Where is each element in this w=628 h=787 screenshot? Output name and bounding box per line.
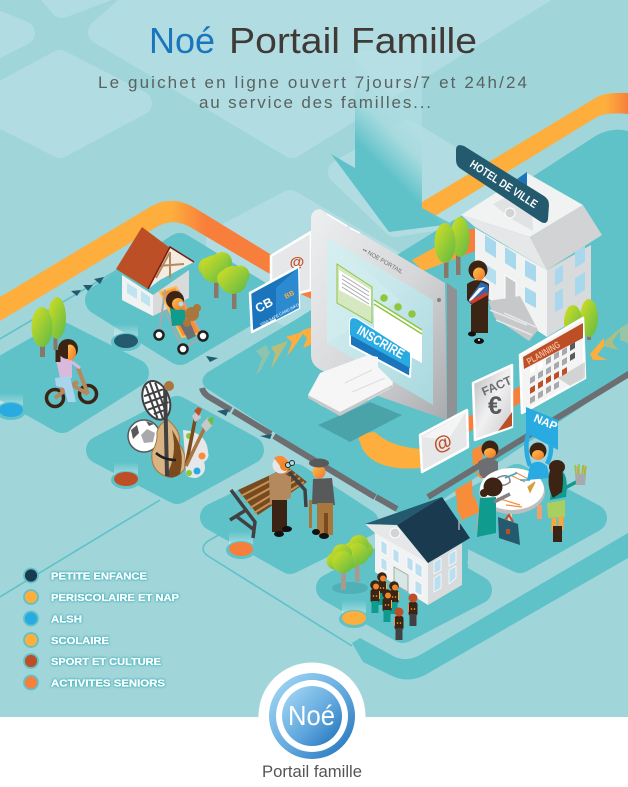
- chevrons left: [256, 327, 312, 375]
- subtitle: Le guichet en ligne ouvert 7jours/7 et 24h/24: [98, 73, 527, 92]
- hand: [308, 355, 393, 416]
- child on bike: [46, 339, 96, 406]
- logo: [258, 662, 366, 781]
- monitor: •• NOE PORTAIL: [361, 248, 404, 276]
- hotel de ville sign: [456, 145, 549, 223]
- marker: scolaire: [339, 600, 369, 628]
- email envelope: [420, 410, 468, 472]
- envelope behind card: @: [290, 254, 304, 271]
- upper right orange road: [422, 93, 628, 216]
- legend item: sport et culture: SPORT ET CULTURE: [51, 656, 161, 668]
- inscrire button: INSCRIRE: [354, 323, 407, 362]
- legend item: periscolaire et nap: [24, 590, 179, 604]
- title: Portail Famille: [229, 20, 477, 61]
- invoice: [473, 365, 514, 440]
- monitor: [308, 209, 457, 420]
- lower teal road band: [352, 533, 628, 680]
- chevrons right: [590, 323, 628, 360]
- bank card: BB: [284, 290, 296, 301]
- subtitle: [98, 73, 527, 112]
- nap sign: NAP: [532, 413, 559, 433]
- girl in teal dress: [477, 478, 510, 537]
- logo: Portail famille: [262, 763, 362, 781]
- decorative light tiles: [0, 0, 548, 315]
- invoice: FACT: [480, 373, 514, 399]
- table top: [479, 468, 545, 514]
- sport and culture icons: [128, 377, 214, 478]
- white footer: [0, 717, 628, 787]
- mayor: [467, 260, 489, 344]
- light notch between school and table platforms: [473, 562, 507, 582]
- title: Noé: [149, 20, 215, 61]
- legend item: activites seniors: ACTIVITES SENIORS: [51, 678, 165, 690]
- pencil cup: [575, 464, 586, 485]
- inscrire button: [350, 318, 411, 377]
- steps: [488, 296, 538, 341]
- route arrows: [71, 277, 272, 439]
- chairs and legs: [455, 445, 542, 532]
- house: [116, 227, 194, 316]
- platform: home: [100, 248, 265, 350]
- oval trees near city hall: [434, 217, 470, 278]
- teal join between school and table platforms: [405, 530, 468, 570]
- big down arrow: [331, 50, 452, 232]
- subtitle: au service des familles...: [199, 93, 431, 112]
- legend item: scolaire: [24, 633, 109, 647]
- legend item: alsh: ALSH: [51, 614, 82, 626]
- platform: seniors: [214, 478, 365, 560]
- orange road left of monitor: [296, 276, 314, 300]
- school: [365, 497, 470, 605]
- city hall: [461, 172, 602, 341]
- platform: table: [440, 478, 593, 559]
- email envelope: @: [431, 431, 455, 457]
- logo: Noé: [288, 700, 335, 731]
- bench: [230, 467, 307, 538]
- trees behind planning: [564, 299, 598, 340]
- legend: [24, 568, 179, 690]
- legend item: alsh: [24, 612, 82, 626]
- invoice: €: [488, 392, 502, 420]
- child holding nap sign: [526, 434, 551, 480]
- teal central platform: [202, 130, 628, 518]
- thin teal route lines: [0, 241, 352, 646]
- legend item: periscolaire et nap: PERISCOLAIRE ET NAP: [51, 592, 179, 604]
- form panel left: [337, 264, 372, 323]
- orange connectors between documents: [466, 386, 520, 434]
- standing woman: [547, 460, 580, 542]
- legend item: sport et culture: [24, 654, 161, 668]
- form panel right: [374, 294, 422, 363]
- elderly man with glasses: [269, 456, 294, 537]
- marker: petite enfance: [111, 324, 141, 351]
- seated child: [475, 440, 505, 478]
- round trees near school: [326, 535, 373, 594]
- planning calendar: PLANNING: [525, 340, 563, 368]
- floor shadow of hand: [318, 402, 402, 442]
- orange curve under monitor: [357, 432, 422, 469]
- title: [149, 20, 477, 61]
- planning calendar: [520, 318, 585, 413]
- marker: alsh: [0, 393, 26, 420]
- round trees near house: [198, 252, 250, 309]
- marker: sport et culture: [111, 462, 141, 489]
- upper left orange road: [0, 201, 275, 324]
- legend item: activites seniors: [24, 676, 165, 690]
- school bag: [498, 515, 520, 545]
- platform: bike: [0, 336, 135, 419]
- platform: sport and culture: [100, 410, 250, 490]
- round table with children: [455, 407, 586, 545]
- legend item: petite enfance: PETITE ENFANCE: [51, 570, 147, 582]
- bank card: VISA SAFE CARD INFO: [259, 302, 300, 327]
- legend item: scolaire: SCOLAIRE: [51, 635, 109, 647]
- orange road segment behind city hall: [412, 229, 478, 271]
- bank card: [250, 267, 300, 332]
- legend item: petite enfance: [24, 568, 147, 582]
- baby in stroller: [154, 287, 208, 354]
- envelope behind card: [271, 232, 311, 300]
- marker: seniors: [226, 531, 256, 559]
- grey platform edge road: [202, 372, 628, 509]
- bank card: CB: [253, 295, 275, 316]
- tall trees near bike: [32, 297, 66, 357]
- hotel de ville sign: HOTEL DE VILLE: [467, 158, 540, 211]
- platform: school: [330, 548, 478, 629]
- school children group: [370, 572, 418, 640]
- elderly man with cane: [309, 458, 335, 539]
